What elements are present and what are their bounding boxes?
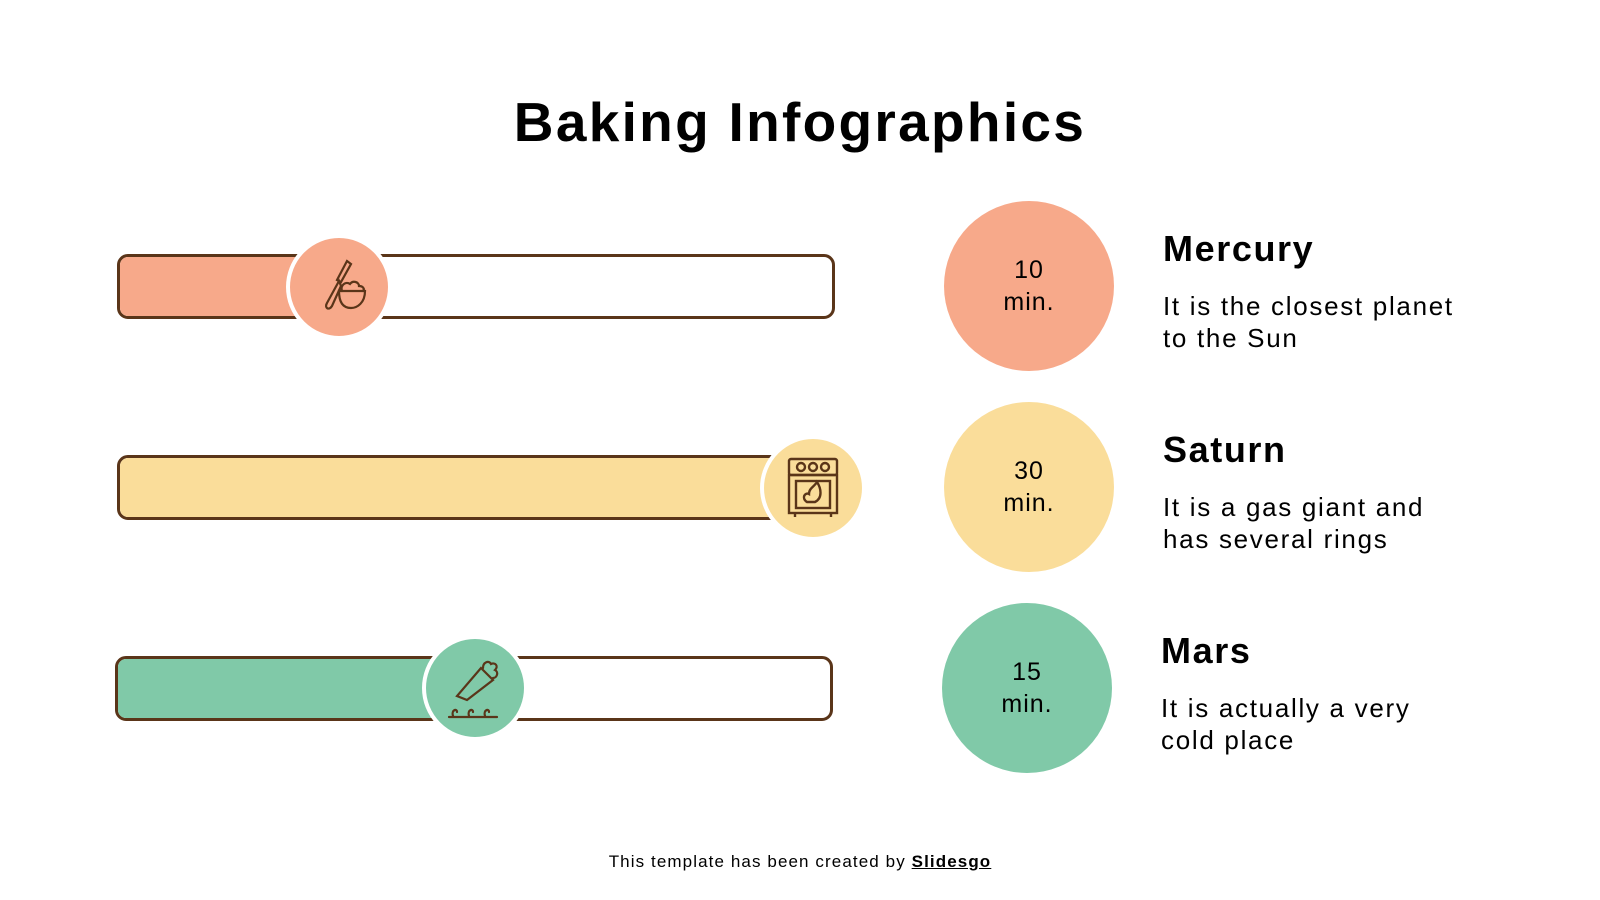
text: Saturn: It is a gas giant and (1163, 492, 1424, 522)
heading: Saturn: Saturn (1163, 429, 1287, 470)
text: Mars (1161, 693, 1411, 755)
text: Mercury: It is the closest planet (1163, 291, 1454, 321)
icon: whisk and bowl (286, 234, 392, 340)
circle: 30 min: 30 (1014, 457, 1044, 485)
title: Baking Infographics (514, 91, 1086, 153)
text: Saturn (1163, 492, 1424, 554)
circle: 15 min: 15 (1012, 658, 1042, 686)
text: Mercury (1163, 291, 1454, 353)
footer: This template has been created by Slidesgo (609, 852, 991, 871)
bar 1 (117, 254, 835, 319)
text: Mars: cold place (1161, 725, 1295, 755)
heading: Mars: Mars (1161, 630, 1251, 671)
circle: 30 min: min. (1003, 489, 1055, 517)
text: Mars: It is actually a very (1161, 693, 1411, 723)
circle: 10 min: 10 (1014, 256, 1044, 284)
text: Saturn: has several rings (1163, 524, 1388, 554)
circle: 10 min (944, 201, 1114, 371)
text: Mercury: to the Sun (1163, 323, 1299, 353)
icon: oven (760, 435, 866, 541)
circle: 15 min (942, 603, 1112, 773)
circle: 30 min (944, 402, 1114, 572)
circle: 15 min: min. (1001, 690, 1053, 718)
icon: piping bag (422, 635, 528, 741)
circle: 10 min: min. (1003, 288, 1055, 316)
bar 2 (117, 455, 835, 520)
heading: Mercury: Mercury (1163, 228, 1314, 269)
bar 3 (115, 656, 833, 721)
